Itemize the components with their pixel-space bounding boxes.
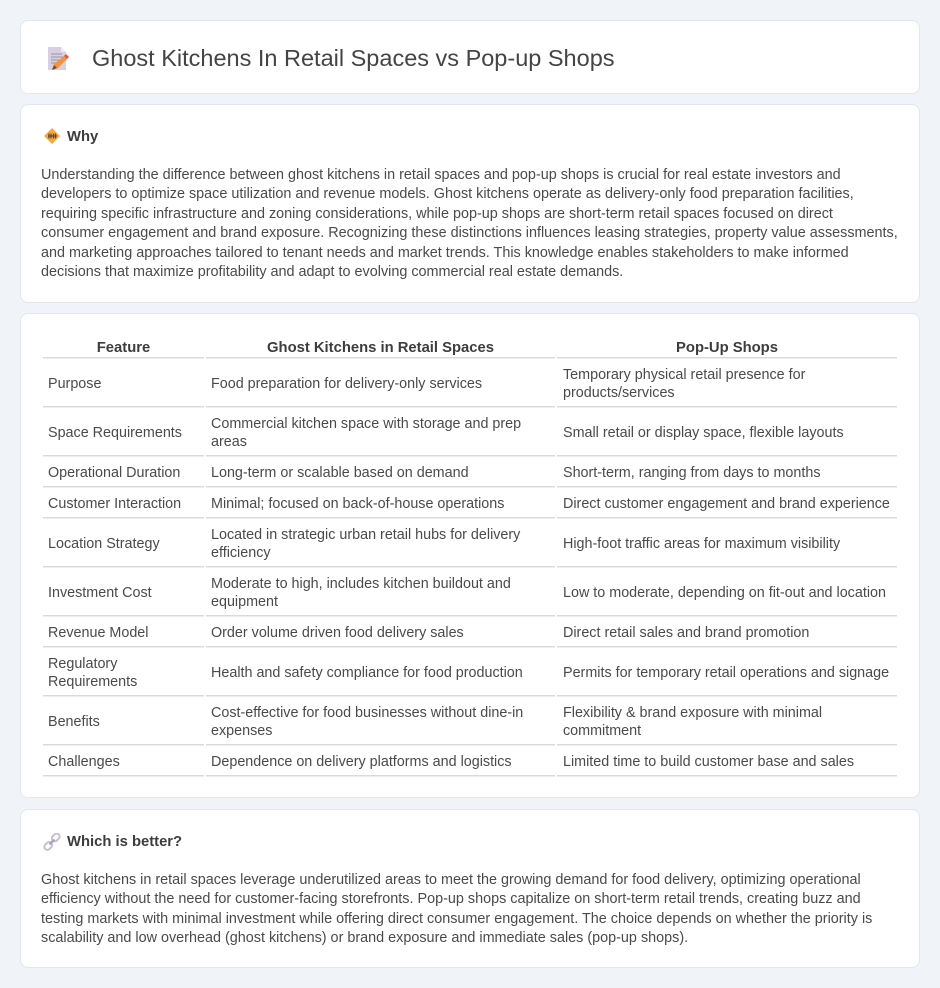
table header: Pop-Up Shops: [676, 340, 778, 356]
heading: which is better: Which is better?: [67, 834, 182, 850]
text block: why paragraph: consumer engagement and brand exposure. Recognizing these distinctions influences leasing strategies, property value assessments,: [41, 225, 898, 241]
table header: [43, 340, 897, 359]
text block: why paragraph: requiring specific infrastructure and zoning considerations, while pop-up shops are short-term retail spaces focused on direct: [41, 206, 833, 222]
text block: which is better paragraph: testing markets with minimal investment while offering direct consumer engagement. The choice depends on whether the priority is: [41, 911, 872, 927]
row: operational duration: Long-term or scalable based on demand: [211, 465, 469, 481]
row: regulatory requirements: Permits for temporary retail operations and signage: [563, 665, 889, 681]
row: location strategy: efficiency: [211, 545, 271, 561]
panel: why: [20, 104, 920, 303]
row: benefits: Flexibility & brand exposure with minimal: [563, 705, 822, 721]
comparison table: [43, 340, 897, 777]
row: regulatory requirements: Regulatory: [48, 656, 117, 672]
row: purpose: Purpose: [48, 376, 101, 392]
title: Ghost Kitchens In Retail Spaces vs Pop-up Shops: [92, 45, 615, 71]
row: location strategy: High-foot traffic areas for maximum visibility: [563, 536, 840, 552]
text block: why paragraph: developers to optimize space utilization and revenue models. Ghost kitchens operate as delivery-only food preparation facilities,: [41, 186, 854, 202]
row: revenue model: Order volume driven food delivery sales: [211, 625, 464, 641]
icon: document with pencil: [48, 47, 69, 70]
text block: why paragraph: Understanding the difference between ghost kitchens in retail spaces and pop-up shops is crucial for real estate investors and: [41, 167, 841, 183]
row: purpose: products/services: [563, 385, 675, 401]
row: operational duration: Short-term, ranging from days to months: [563, 465, 820, 481]
row: investment cost: Low to moderate, depending on fit-out and location: [563, 585, 886, 601]
row: purpose: Food preparation for delivery-only services: [211, 376, 482, 392]
row: benefits: Cost-effective for food businesses without dine-in: [211, 705, 523, 721]
row: customer interaction: [43, 496, 897, 519]
icon: chain link: [43, 833, 61, 851]
row: challenges: Challenges: [48, 754, 120, 770]
row: revenue model: Direct retail sales and brand promotion: [563, 625, 809, 641]
row: regulatory requirements: Requirements: [48, 674, 137, 690]
row: location strategy: Location Strategy: [48, 536, 160, 552]
row: regulatory requirements: [43, 656, 897, 697]
text block: why paragraph: and marketing approaches tailored to tenant needs and market trends. This knowledge enables stakeholders to make informed: [41, 245, 849, 261]
row: operational duration: Operational Duration: [48, 465, 180, 481]
row: location strategy: Located in strategic urban retail hubs for delivery: [211, 527, 520, 543]
row: investment cost: equipment: [211, 594, 278, 610]
row: customer interaction: Minimal; focused on back-of-house operations: [211, 496, 504, 512]
row: revenue model: Revenue Model: [48, 625, 148, 641]
text block: which is better paragraph: Ghost kitchens in retail spaces leverage underutilized areas to meet the growing demand for food delivery, optimizing operational: [41, 872, 861, 888]
icon: warning diamond: [44, 128, 60, 144]
table header: Feature: [97, 340, 150, 356]
panel: comparison table: [20, 313, 920, 798]
text block: why paragraph: decisions that maximize profitability and adapt to evolving commercial real estate demands.: [41, 264, 623, 280]
row: revenue model: [43, 625, 897, 648]
row: regulatory requirements: Health and safety compliance for food production: [211, 665, 523, 681]
row: space requirements: [43, 416, 897, 457]
text block: which is better paragraph: scalability and low overhead (ghost kitchens) or brand exposure and immediate sales (pop-up shops).: [41, 930, 688, 946]
text block: which is better paragraph: efficiency without the need for customer-facing storefronts. Pop-up shops capitalize on short-term retail trends, creating buzz and: [41, 891, 861, 907]
panel: title card: [20, 20, 920, 94]
row: investment cost: Moderate to high, includes kitchen buildout and: [211, 576, 511, 592]
row: purpose: Temporary physical retail presence for: [563, 367, 805, 383]
table header: Ghost Kitchens in Retail Spaces: [267, 340, 494, 356]
row: customer interaction: Customer Interaction: [48, 496, 181, 512]
row: benefits: [43, 705, 897, 746]
row: space requirements: Commercial kitchen space with storage and prep: [211, 416, 521, 432]
row: challenges: Limited time to build customer base and sales: [563, 754, 854, 770]
row: benefits: Benefits: [48, 714, 100, 730]
heading: why: Why: [67, 129, 98, 145]
row: investment cost: [43, 576, 897, 617]
row: location strategy: [43, 527, 897, 568]
row: operational duration: [43, 465, 897, 488]
row: purpose: [43, 367, 897, 408]
row: space requirements: Space Requirements: [48, 425, 182, 441]
row: benefits: expenses: [211, 723, 272, 739]
text block: which is better paragraph: [41, 872, 872, 946]
row: challenges: Dependence on delivery platforms and logistics: [211, 754, 512, 770]
text block: why paragraph: [41, 167, 898, 280]
row: challenges: [43, 754, 897, 777]
row: benefits: commitment: [563, 723, 641, 739]
row: space requirements: Small retail or display space, flexible layouts: [563, 425, 844, 441]
row: space requirements: areas: [211, 434, 247, 450]
row: customer interaction: Direct customer engagement and brand experience: [563, 496, 890, 512]
panel: which is better: [20, 809, 920, 968]
row: investment cost: Investment Cost: [48, 585, 152, 601]
